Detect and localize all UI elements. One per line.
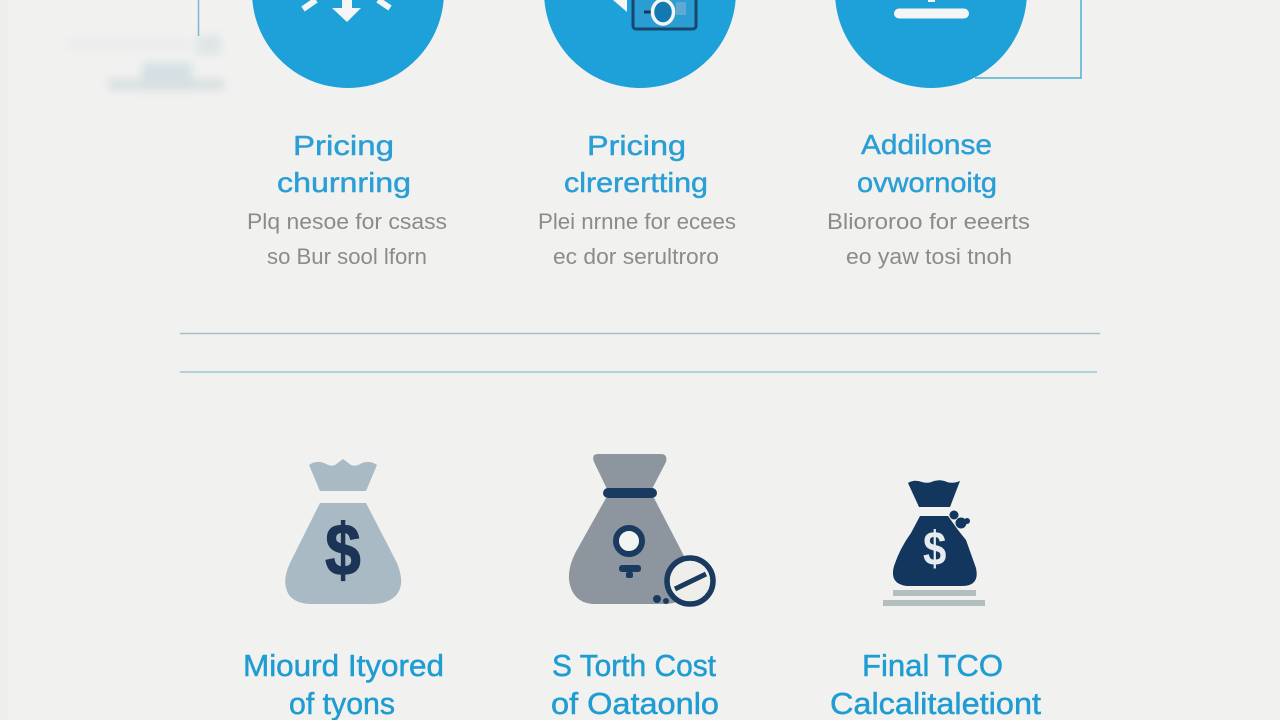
heading: pricing clearing: [564, 130, 708, 198]
panel: mixed ignored items: [243, 459, 444, 720]
icon: navy money bag on base: $: [923, 521, 946, 576]
heading: sixth cost of ownership: S Torth Cost: [552, 648, 716, 683]
divider: upper line: [180, 332, 1100, 334]
heading: additional overloading: [857, 129, 997, 198]
panel: final TCO calculation: [830, 480, 1041, 720]
text block: pricing churning description: Plq nesoe for csass: [247, 209, 447, 234]
text block: additional overloading description: Bliororoo for eeerts: [827, 209, 1030, 234]
heading: pricing clearing: Pricing: [587, 130, 686, 161]
heading: final TCO calculation: [830, 648, 1041, 720]
heading: mixed ignored items: [243, 648, 444, 720]
panel: pricing churning: [247, 0, 447, 269]
text block: additional overloading description: [827, 209, 1030, 269]
text block: pricing clearing description: [538, 209, 736, 269]
heading: final TCO calculation: Final TCO: [862, 648, 1003, 683]
text block: pricing churning description: [247, 209, 447, 269]
icon: blue circle with white bar: [835, 0, 1027, 88]
icon: blue circle with gauge box: [544, 0, 736, 88]
icon: light money bag: $: [325, 509, 361, 591]
divider: lower line: [180, 371, 1097, 373]
text block: pricing churning description: so Bur sool lforn: [267, 244, 427, 269]
icon: navy money bag on base: [883, 480, 985, 606]
icon: light money bag: [285, 459, 401, 604]
heading: sixth cost of ownership: [551, 648, 719, 720]
heading: pricing churning: [277, 130, 411, 198]
panel: additional overloading: [827, 0, 1030, 269]
text block: additional overloading description: eo yaw tosi tnoh: [846, 244, 1012, 269]
frame: left corner line: [198, 0, 200, 36]
blurred smudges: faded top-left label: [68, 35, 224, 91]
panel: sixth cost of ownership: [551, 454, 719, 720]
heading: additional overloading: Addilonse: [861, 129, 992, 160]
heading: pricing churning: Pricing: [293, 130, 394, 161]
heading: additional overloading: ovwornoitg: [857, 167, 997, 198]
heading: final TCO calculation: Calcalitaletiont: [830, 686, 1041, 720]
icon: grey money bag with prohibition mark: [569, 454, 713, 604]
panel: pricing clearing: [538, 0, 736, 269]
heading: pricing clearing: clrerertting: [564, 167, 708, 198]
frame: right corner bracket: [975, 0, 1081, 78]
text block: pricing clearing description: Plei nrnne for ecees: [538, 209, 736, 234]
text block: pricing clearing description: ec dor serultroro: [553, 244, 719, 269]
heading: sixth cost of ownership: of Oataonlo: [551, 686, 719, 720]
heading: mixed ignored items: of tyons: [289, 686, 395, 720]
heading: mixed ignored items: Miourd Ityored: [243, 648, 444, 683]
icon: blue circle with arrows: [252, 0, 444, 88]
heading: pricing churning: churnring: [277, 167, 411, 198]
